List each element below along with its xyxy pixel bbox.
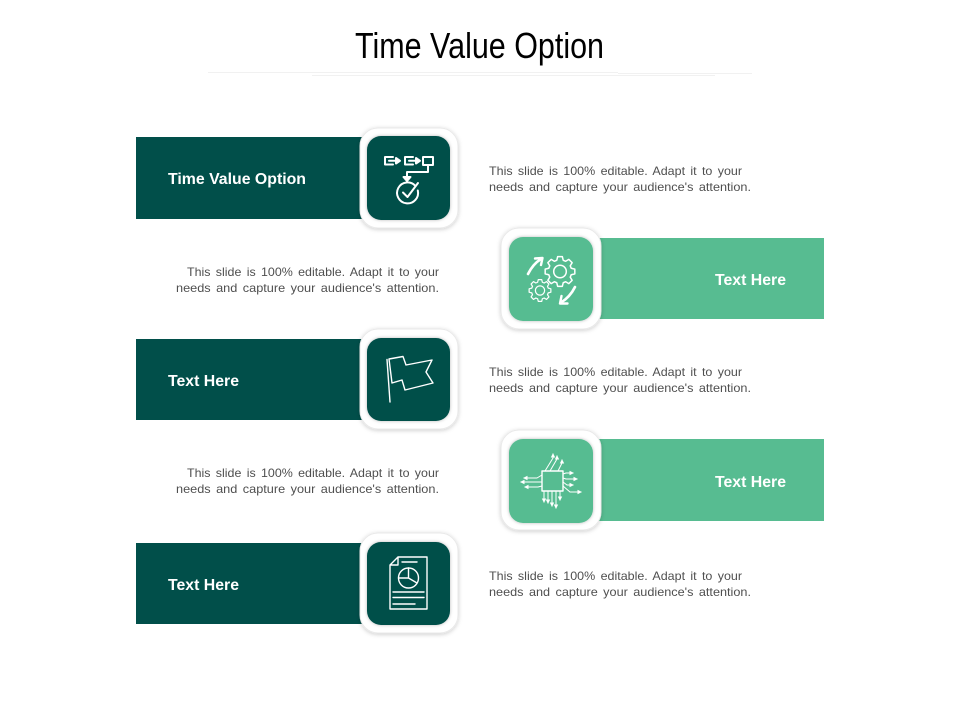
icon tile 4 — [509, 439, 593, 523]
text block 3 — [489, 365, 751, 395]
text block 2: needs and capture your audience's attention. — [176, 281, 439, 295]
banner heading 5: Text Here — [168, 577, 239, 594]
text block 1 — [489, 164, 751, 194]
icon card 5 — [360, 533, 458, 633]
text block 3: This slide is 100% editable. Adapt it to your — [489, 365, 742, 379]
banner heading 4: Text Here — [715, 474, 786, 491]
icon: flag — [387, 356, 433, 402]
banner bar 2 — [596, 238, 824, 319]
title: Time Value Option — [355, 25, 604, 66]
icon: process flow with check — [385, 157, 433, 203]
banner bar 5 — [136, 543, 364, 624]
text block 4: This slide is 100% editable. Adapt it to your — [187, 466, 439, 480]
panel: text here right 2 — [501, 430, 824, 530]
icon tile 2 — [509, 237, 593, 321]
text block 2: This slide is 100% editable. Adapt it to your — [187, 265, 439, 279]
banner bar 3 — [136, 339, 364, 420]
icon: report document — [390, 557, 427, 609]
icon tile 1 — [367, 136, 450, 220]
icon card 3 — [360, 329, 458, 429]
icon: gears with arrows — [528, 257, 575, 304]
icon tile 5 — [367, 542, 450, 625]
icon card 2 — [501, 228, 601, 329]
panel: time value option — [136, 128, 458, 228]
banner bar 4 — [596, 439, 824, 521]
text block 4: needs and capture your audience's attention. — [176, 482, 439, 496]
text block 5: needs and capture your audience's attention. — [489, 585, 751, 599]
icon card 1 — [360, 128, 458, 228]
banner bar 1 — [136, 137, 364, 219]
text block 1: This slide is 100% editable. Adapt it to your — [489, 164, 742, 178]
panel: text here left 3 — [136, 533, 458, 633]
panel: text here right 1 — [501, 228, 824, 329]
banner heading 3: Text Here — [168, 373, 239, 390]
text block 4 — [176, 466, 439, 496]
text block 3: needs and capture your audience's attention. — [489, 381, 751, 395]
banner heading 1: Time Value Option — [168, 171, 306, 188]
banner heading 2: Text Here — [715, 272, 786, 289]
text block 1: needs and capture your audience's attention. — [489, 180, 751, 194]
icon: microchip — [521, 454, 581, 508]
panel: text here left 2 — [136, 329, 458, 429]
icon card 4 — [501, 430, 601, 530]
icon tile 3 — [367, 338, 450, 421]
text block 2 — [176, 265, 439, 295]
text block 5: This slide is 100% editable. Adapt it to your — [489, 569, 742, 583]
text block 5 — [489, 569, 751, 599]
